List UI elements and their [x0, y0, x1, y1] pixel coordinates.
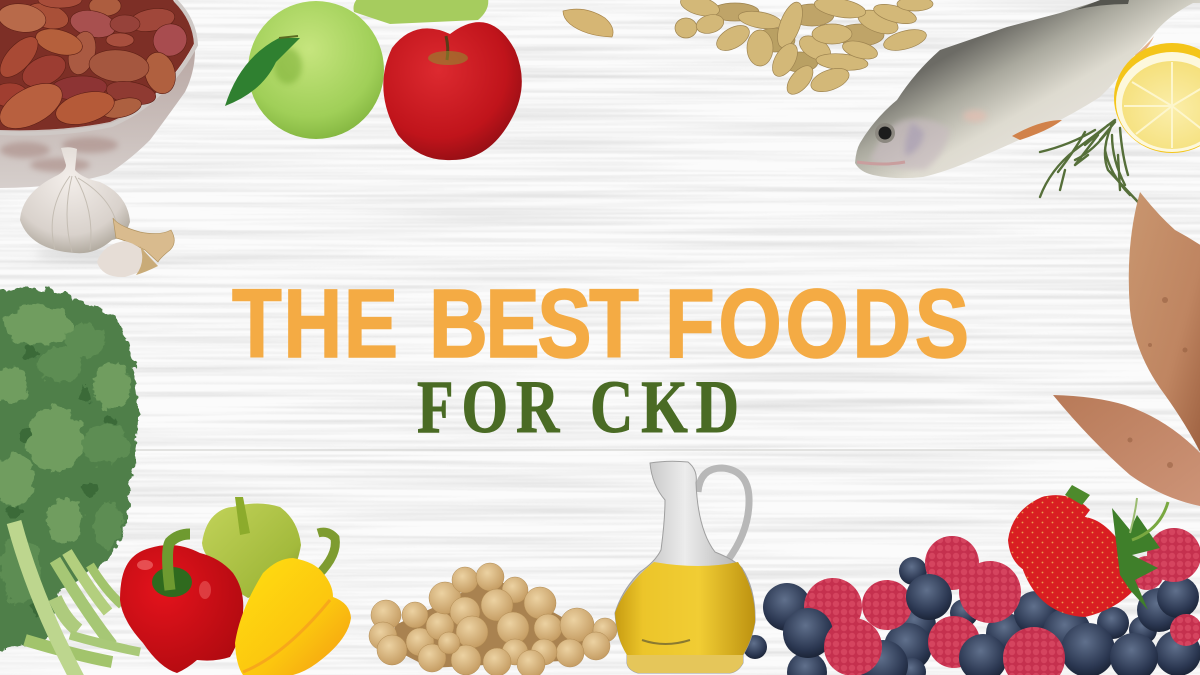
apples: [225, 0, 522, 160]
title: the best foods: THE: [232, 269, 400, 378]
olive oil jug: [615, 461, 755, 673]
rosemary sprig: [1040, 120, 1138, 202]
barley pile: [675, 0, 933, 99]
title: the best foods: BEST: [429, 269, 657, 378]
kale: [0, 288, 140, 675]
subtitle: for ckd: FOR CKD: [417, 365, 747, 449]
title: the best foods: FOODS: [665, 269, 973, 378]
sweet potatoes: [1053, 192, 1200, 507]
mixed berries: [743, 485, 1200, 675]
lemon slice: [1114, 43, 1200, 153]
single barley grain: [563, 9, 613, 37]
chickpeas: [369, 563, 617, 675]
fish: [855, 0, 1200, 178]
bowl of kidney beans: [0, 0, 196, 188]
bell peppers: [120, 497, 351, 675]
garlic bulb and cloves: [20, 147, 174, 277]
